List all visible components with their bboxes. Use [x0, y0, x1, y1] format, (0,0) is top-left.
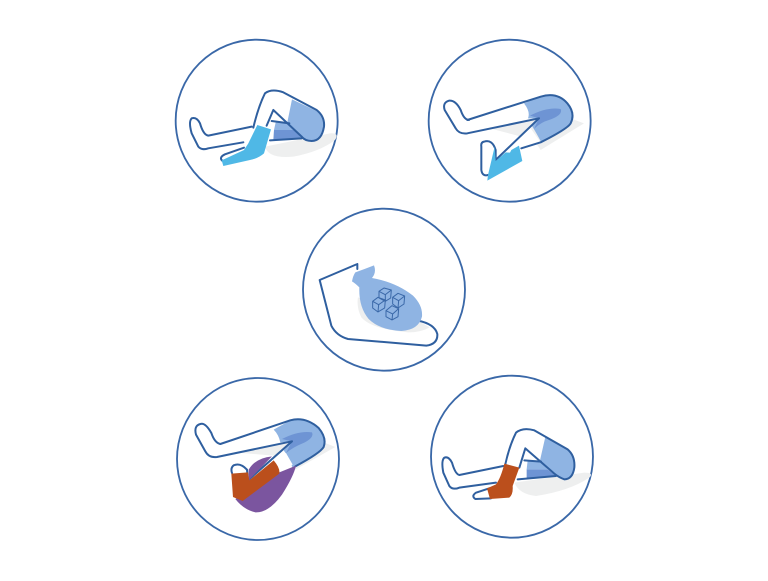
- panel: leg bent with blue boot: [176, 40, 338, 202]
- panel: leg with purple and orange wrap: [177, 378, 339, 540]
- panel: leg bent with orange bandage: [431, 376, 593, 538]
- panel: foot with ice bag: [303, 209, 465, 371]
- panel: leg with foot flexed and blue boot: [429, 40, 591, 202]
- icon: ice cubes: [373, 288, 405, 320]
- shin highlight: [272, 453, 293, 472]
- icon: ice bag: [352, 265, 422, 331]
